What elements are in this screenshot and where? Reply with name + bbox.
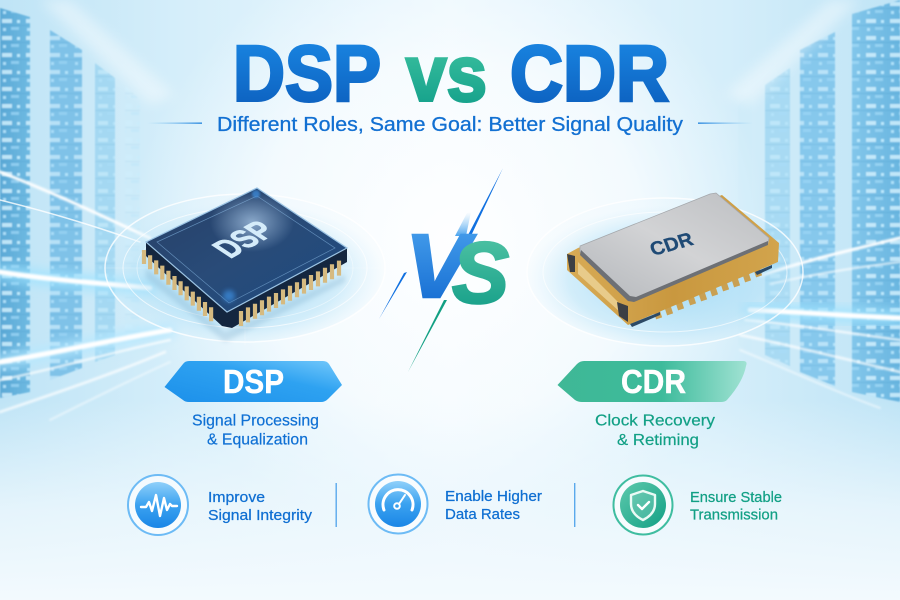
VS emblem [379, 168, 509, 372]
DSP description: Signal Processing [192, 412, 319, 430]
central light wash [130, 0, 770, 540]
letter S: S [452, 226, 509, 322]
benefit: ensure stable transmission [614, 476, 782, 534]
text: improve signal integrity: Improve [208, 489, 265, 506]
text: ensure stable transmission: Transmission [690, 506, 778, 524]
text: enable higher data rates: Data Rates [445, 506, 520, 523]
icon: gauge [368, 474, 428, 534]
chip pins front-left [144, 250, 211, 321]
chip top face [146, 188, 347, 312]
icon: waveform [128, 475, 188, 535]
text: improve signal integrity [208, 489, 313, 524]
title word: CDR: CDR [510, 28, 669, 118]
DSP chip illustration [104, 188, 385, 345]
slash: lower-left blue [379, 272, 407, 319]
subtitle: Different Roles, Same Goal: Better Signal Quality [217, 114, 683, 136]
chip reflection [146, 268, 345, 342]
text: ensure stable transmission [690, 489, 782, 524]
CDR description: Clock Recovery [595, 412, 715, 430]
CDR description [595, 412, 715, 449]
left server racks [0, 8, 140, 398]
icon: shield [614, 476, 672, 534]
benefit: improve signal integrity [128, 475, 313, 535]
title [233, 28, 669, 118]
slash: green [408, 300, 447, 372]
chip label DSP: DSP [204, 215, 284, 263]
chip label CDR: CDR [647, 229, 696, 261]
text: improve signal integrity: Signal Integrity [208, 507, 313, 524]
gold package base [567, 195, 779, 325]
orbit rings around CDR chip [527, 198, 803, 346]
DSP label [164, 361, 342, 448]
title word: DSP: DSP [233, 28, 381, 118]
orbit rings around DSP chip [104, 190, 385, 345]
CDR description: & Retiming [617, 432, 699, 449]
V streak [455, 212, 471, 236]
DSP badge [164, 361, 342, 402]
top light beams [40, 0, 860, 105]
metal lid [580, 193, 769, 298]
CDR label [558, 361, 747, 449]
CDR chip illustration [527, 193, 803, 346]
DSP description [192, 412, 319, 448]
CDR badge: CDR [621, 363, 686, 400]
slash: upper blue [467, 168, 503, 238]
DSP description: & Equalization [207, 432, 308, 448]
light streaks left [0, 172, 170, 420]
chip body sides [146, 242, 347, 328]
right server racks [738, 0, 900, 402]
benefit: enable higher data rates [368, 474, 542, 534]
text: enable higher data rates [445, 488, 542, 523]
CDR pins [655, 272, 761, 316]
letter V: V [405, 217, 476, 317]
CDR badge [558, 361, 747, 402]
text: enable higher data rates: Enable Higher [445, 488, 542, 505]
chip pins front-right [241, 261, 339, 326]
text: ensure stable transmission: Ensure Stable [690, 489, 782, 506]
light streaks right [740, 238, 900, 408]
DSP badge: DSP [223, 363, 284, 400]
title word: vs: vs [406, 28, 487, 118]
